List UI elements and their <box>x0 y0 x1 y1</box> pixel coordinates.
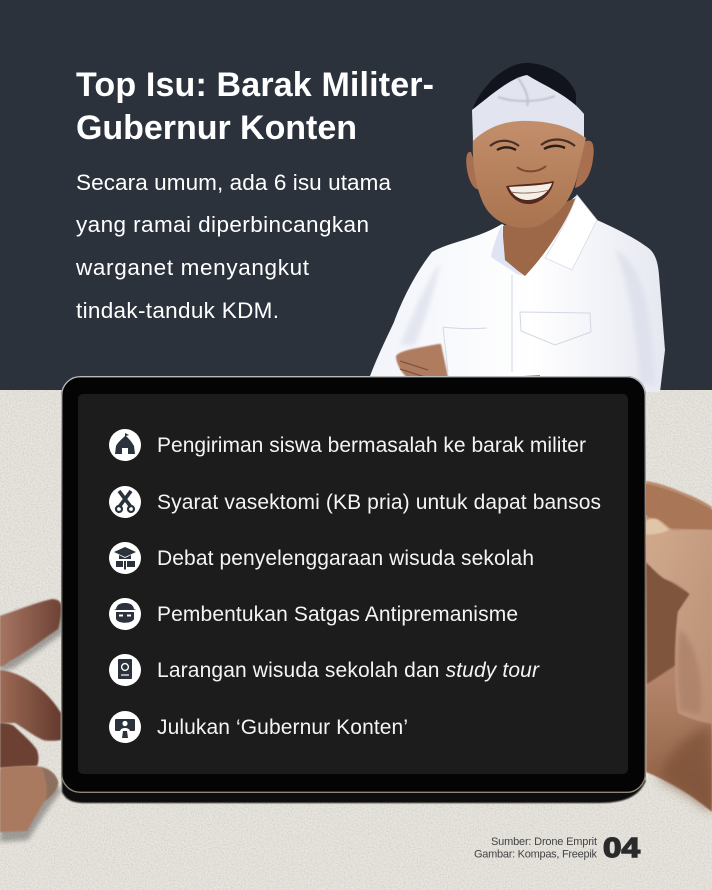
icon: travel guide book <box>109 654 141 686</box>
intro text: yang ramai diperbincangkan <box>76 212 369 237</box>
icon: graduation cap and books <box>109 542 141 574</box>
middle finger <box>0 670 61 741</box>
dark fingers behind thumb <box>646 562 690 684</box>
ears <box>466 141 594 190</box>
upper finger shade <box>646 484 712 530</box>
thumb <box>0 766 58 832</box>
ring finger <box>0 723 38 768</box>
page number: 04 <box>603 832 640 863</box>
intro text <box>75 170 391 323</box>
title: Top Isu: Barak Militer- <box>76 66 434 104</box>
neck <box>503 198 576 276</box>
eyes and brows <box>490 139 575 146</box>
icon: military tent <box>109 429 141 461</box>
shirt shading and pocket details <box>400 250 655 385</box>
intro text: tindak-tanduk KDM. <box>76 298 279 323</box>
item 4: Pembentukan Satgas Antipremanisme <box>157 603 518 626</box>
collar <box>545 195 597 270</box>
intro text: Secara umum, ada 6 isu utama <box>76 170 391 195</box>
portrait: smiling man in white shirt and headband <box>370 63 665 392</box>
issue list <box>109 429 601 743</box>
index finger <box>0 599 61 667</box>
source credits <box>474 836 598 860</box>
thumbnail <box>42 768 58 800</box>
shirt <box>370 195 665 392</box>
dark header background <box>0 0 712 391</box>
palm <box>646 481 712 812</box>
black cap <box>472 63 576 112</box>
thumb mottled shade <box>677 630 701 715</box>
title: Gubernur Konten <box>76 109 357 147</box>
tablet <box>61 376 646 803</box>
item 2: Syarat vasektomi (KB pria) untuk dapat bansos <box>157 491 601 514</box>
thumb <box>638 518 712 724</box>
lower palm shade <box>660 725 712 812</box>
teeth <box>509 183 552 200</box>
item 5: Larangan wisuda sekolah dan study tour <box>157 659 540 682</box>
white headband <box>472 75 584 141</box>
smile <box>506 181 554 204</box>
tablet shadow <box>62 770 646 803</box>
tablet edge highlight <box>62 377 645 792</box>
item 6 <box>109 711 408 743</box>
item 1 <box>109 429 586 461</box>
crossed arm hand <box>396 344 450 386</box>
source credits: Sumber: Drone Emprit <box>491 836 597 848</box>
item 6: Julukan ‘Gubernur Konten’ <box>157 716 408 739</box>
item 3 <box>109 542 534 574</box>
nose <box>517 166 546 171</box>
icon: scissors <box>109 486 141 518</box>
item 2 <box>109 486 601 518</box>
source credits: Gambar: Kompas, Freepik <box>474 848 598 860</box>
thumbnail <box>639 519 669 535</box>
item 5 <box>109 654 540 686</box>
tablet screen <box>78 394 628 774</box>
item 1: Pengiriman siswa bermasalah ke barak militer <box>157 434 586 457</box>
right hand <box>638 481 712 812</box>
item 3: Debat penyelenggaraan wisuda sekolah <box>157 547 534 570</box>
title <box>76 66 434 147</box>
left hand fingers <box>0 599 66 842</box>
head <box>473 118 586 228</box>
collar left <box>491 224 524 276</box>
tablet body <box>61 376 646 793</box>
icon: masked bandit <box>109 598 141 630</box>
finger shadows <box>0 604 66 842</box>
paper textured background <box>0 390 712 890</box>
icon: content creator selfie <box>109 711 141 743</box>
intro text: warganet menyangkut <box>75 255 310 280</box>
item 4 <box>109 598 518 630</box>
